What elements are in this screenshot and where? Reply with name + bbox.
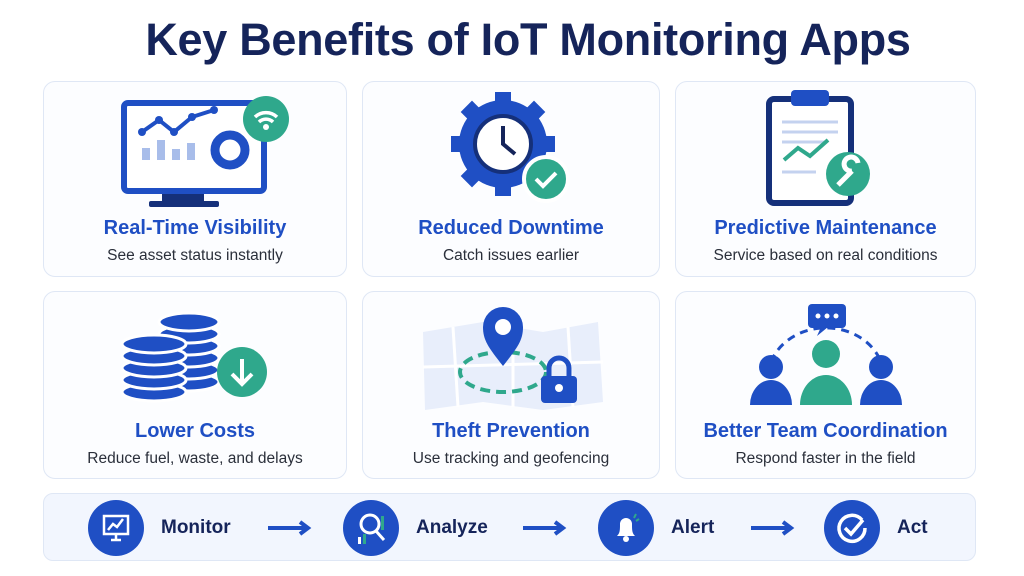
card text: Respond faster in the field: [735, 450, 916, 467]
icon: coins arrow: [124, 314, 267, 400]
process bar: [43, 493, 976, 561]
icon: monitor: [121, 96, 289, 207]
card heading: Theft Prevention: [432, 420, 590, 442]
card text: Catch issues earlier: [443, 247, 579, 264]
card text: Use tracking and geofencing: [413, 450, 609, 467]
icon: map pin lock: [423, 307, 603, 410]
panel: better team coordination: [675, 291, 976, 479]
card text: See asset status instantly: [107, 247, 283, 264]
title: Key Benefits of IoT Monitoring Apps: [145, 14, 911, 65]
arrow: [751, 520, 794, 536]
card heading: Better Team Coordination: [703, 420, 948, 442]
step: alert: [598, 500, 714, 556]
step: monitor: [88, 500, 231, 556]
card heading: Predictive Maintenance: [714, 217, 937, 239]
panel: theft prevention: [362, 291, 660, 479]
card text: Service based on real conditions: [713, 247, 938, 264]
step: monitor: Monitor: [161, 517, 231, 538]
step: analyze: Analyze: [416, 517, 488, 538]
step: act: Act: [897, 517, 928, 538]
step: act: [824, 500, 928, 556]
panel: lower costs: [43, 291, 347, 479]
icon: gear clock check: [451, 92, 566, 199]
card heading: Real-Time Visibility: [104, 217, 286, 239]
step: analyze: [343, 500, 488, 556]
card heading: Reduced Downtime: [418, 217, 604, 239]
arrow: [523, 520, 566, 536]
panel: predictive maintenance: [675, 81, 976, 277]
arrow: [268, 520, 312, 536]
step: alert: Alert: [671, 517, 714, 538]
panel: real-time visibility: [43, 81, 347, 277]
card text: Reduce fuel, waste, and delays: [87, 450, 303, 467]
icon: team: [750, 304, 902, 405]
card heading: Lower Costs: [135, 420, 255, 442]
icon: clipboard wrench: [766, 90, 870, 206]
panel: reduced downtime: [362, 81, 660, 277]
